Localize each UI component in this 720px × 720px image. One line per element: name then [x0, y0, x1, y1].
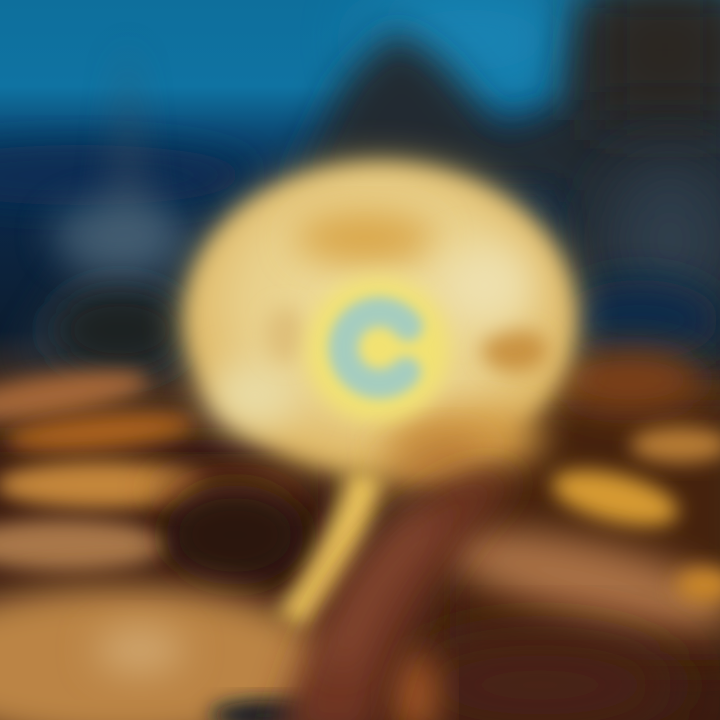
coin: large golden disc: [180, 158, 580, 478]
coin pile: right side: [435, 348, 720, 660]
coin centre: yellow ring: [307, 278, 449, 422]
hand: fingers holding the coin: [270, 438, 520, 720]
coin pile: bottom foreground: [0, 585, 680, 720]
coin surface tarnish patches: [210, 212, 548, 470]
coin pile: left side: [0, 360, 330, 610]
coin centre: pale blue C symbol: [343, 312, 408, 384]
background: mountains and distant scenery: [0, 0, 720, 375]
